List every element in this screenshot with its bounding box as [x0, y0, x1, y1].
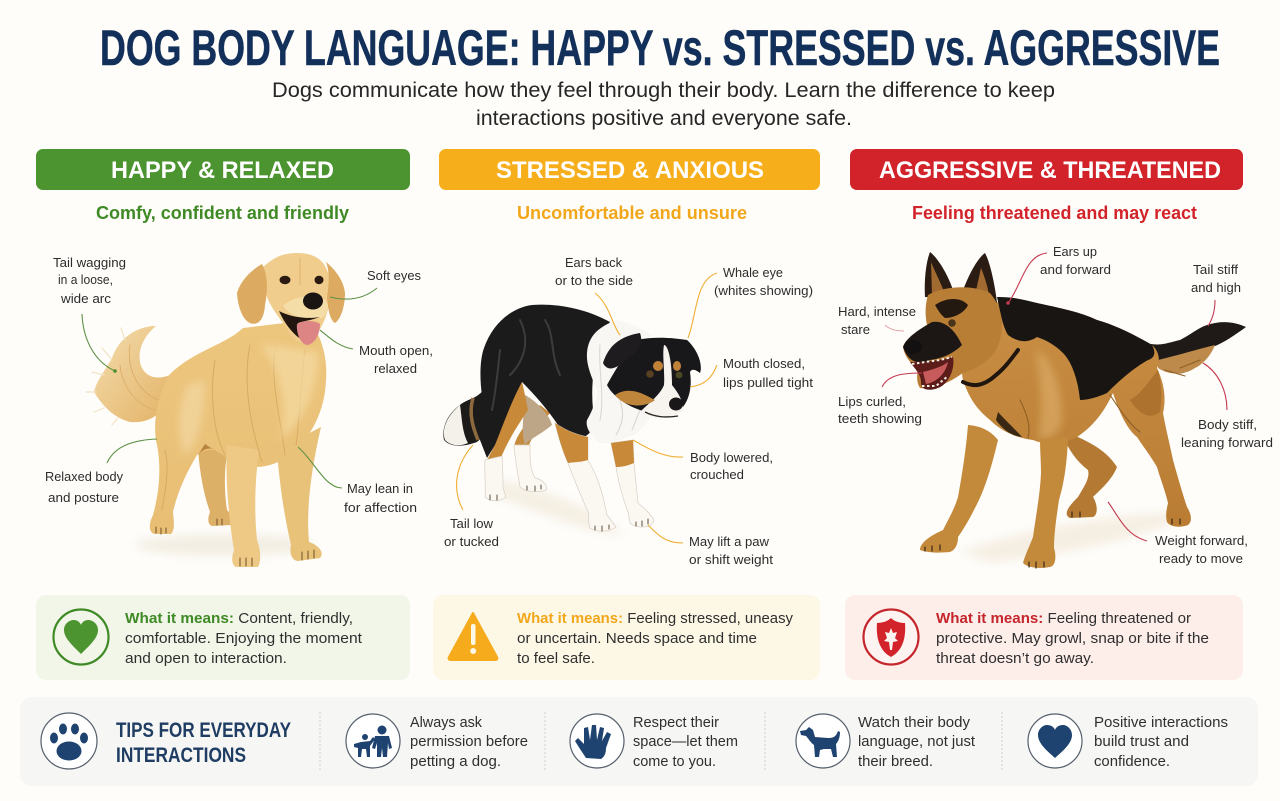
tips heading: INTERACTIONS — [116, 744, 246, 767]
tip text: permission before — [410, 734, 528, 750]
callout: relaxed body: Relaxed body — [45, 469, 123, 484]
callout: tail: wide arc — [60, 291, 111, 306]
callout: lips curled: teeth showing — [838, 411, 922, 426]
dog illustration: collie — [443, 305, 701, 535]
callout: may lift a paw — [648, 525, 773, 567]
callout: whale eye: Whale eye — [723, 265, 783, 280]
callout: may lift a paw: or shift weight — [689, 552, 773, 567]
callout: body stiff: leaning forward — [1181, 435, 1273, 450]
callout: ears back: Ears back — [565, 255, 622, 270]
callout: soft eyes — [330, 268, 421, 299]
callout: ears back — [555, 255, 633, 335]
heading bar: aggressive: AGGRESSIVE & THREATENED — [879, 157, 1221, 184]
meaning text: stressed: What it means: Feeling stressed, uneasy — [517, 610, 793, 627]
callout: body lowered — [633, 440, 773, 482]
callout: tail low: Tail low — [450, 516, 493, 531]
tip text: Respect their — [633, 715, 719, 731]
panel: stressed and anxious — [433, 149, 820, 680]
tip text: come to you. — [633, 754, 716, 770]
callout: may lean in: for affection — [344, 500, 417, 515]
heading bar: happy: HAPPY & RELAXED — [111, 157, 334, 184]
callout: may lean in: May lean in — [347, 481, 413, 496]
callout: tail — [53, 255, 126, 373]
tip text: Positive interactions — [1094, 715, 1228, 731]
meaning text: happy: comfortable. Enjoying the moment — [125, 630, 363, 647]
meaning text: happy: and open to interaction. — [125, 650, 287, 667]
callout: weight forward: Weight forward, — [1155, 533, 1248, 548]
tip text — [858, 715, 975, 770]
callout: tail low: or tucked — [444, 534, 499, 549]
callout: body stiff — [1181, 363, 1273, 450]
meaning panel: happy — [36, 595, 410, 680]
meaning panel: stressed — [433, 595, 820, 680]
meaning panel: aggressive — [845, 595, 1243, 680]
tip: positive interactions — [1028, 714, 1228, 770]
meaning text: aggressive: threat doesn’t go away. — [936, 650, 1094, 667]
callout: tail: in a loose, — [58, 272, 113, 287]
meaning text: happy — [125, 610, 363, 667]
tip text — [1094, 715, 1228, 770]
callout: body lowered: crouched — [690, 467, 744, 482]
callout: mouth open: relaxed — [374, 361, 417, 376]
meaning text: aggressive — [936, 610, 1209, 667]
tip text — [410, 715, 528, 770]
callout: hard stare: stare — [841, 322, 870, 337]
tip text: their breed. — [858, 754, 933, 770]
tips heading — [116, 719, 291, 767]
intro text: Dogs communicate how they feel through their body. Learn the difference to keep — [272, 78, 1055, 102]
callout: tail stiff: Tail stiff — [1193, 262, 1238, 277]
tip text: petting a dog. — [410, 754, 501, 770]
tip text: Watch their body — [858, 715, 971, 731]
meaning text: stressed: or uncertain. Needs space and time — [517, 630, 757, 647]
subheading: happy: Comfy, confident and friendly — [96, 203, 349, 223]
icon: dog silhouette — [796, 714, 850, 768]
callout: mouth closed: Mouth closed, — [723, 356, 805, 371]
meaning text: stressed: to feel safe. — [517, 650, 595, 667]
panel: tips for everyday interactions — [20, 697, 1258, 786]
icon: shield in circle — [864, 610, 918, 664]
callout: relaxed body: and posture — [48, 490, 119, 505]
callout: mouth closed: lips pulled tight — [723, 375, 813, 390]
callout: lips curled — [838, 373, 922, 426]
tips heading: TIPS FOR EVERYDAY — [116, 719, 291, 742]
meaning text: aggressive: What it means: Feeling threatened or — [936, 610, 1191, 627]
icon: heart — [1028, 714, 1082, 768]
heading bar: stressed: STRESSED & ANXIOUS — [496, 157, 764, 184]
panel: happy and relaxed — [36, 149, 433, 680]
dog illustration: german shepherd — [903, 252, 1246, 568]
tip: watch body language — [796, 714, 975, 770]
tip text: space—let them — [633, 734, 738, 750]
callout: may lift a paw: May lift a paw — [689, 534, 769, 549]
icon: heart in circle — [54, 610, 108, 664]
heading bar: stressed — [439, 149, 820, 190]
icon: hand — [570, 714, 624, 768]
icon: warning triangle — [449, 613, 497, 660]
tip: respect space — [570, 714, 738, 770]
meaning text: aggressive: protective. May growl, snap or bite if the — [936, 630, 1209, 647]
callout: tail low — [444, 445, 499, 549]
callout: tail stiff — [1191, 262, 1241, 326]
tip text — [633, 715, 738, 770]
panel: aggressive and threatened — [838, 149, 1273, 680]
icon: paw — [41, 713, 97, 769]
subheading: aggressive: Feeling threatened and may react — [912, 203, 1197, 223]
callout: hard stare: Hard, intense — [838, 304, 916, 319]
callout: ears back: or to the side — [555, 273, 633, 288]
callout: weight forward: ready to move — [1159, 551, 1243, 566]
callout: soft eyes: Soft eyes — [367, 268, 421, 283]
tip text: language, not just — [858, 734, 975, 750]
callout: body stiff: Body stiff, — [1198, 417, 1257, 432]
subheading: stressed: Uncomfortable and unsure — [517, 203, 747, 223]
meaning text: happy: What it means: Content, friendly, — [125, 610, 353, 627]
callout: relaxed body — [45, 439, 157, 505]
meaning text: stressed — [517, 610, 793, 667]
callout: hard stare — [838, 304, 916, 337]
callout: mouth closed — [690, 356, 813, 390]
callout: lips curled: Lips curled, — [838, 394, 906, 409]
callout: whale eye — [688, 265, 813, 338]
callout: tail stiff: and high — [1191, 280, 1241, 295]
callout: mouth open: Mouth open, — [359, 343, 433, 358]
heading bar: happy — [36, 149, 410, 190]
callout: ears up — [1006, 244, 1111, 305]
callout: ears up: and forward — [1040, 262, 1111, 277]
callout: may lean in — [298, 447, 417, 515]
tip text: confidence. — [1094, 754, 1170, 770]
intro text — [272, 78, 1055, 130]
callout: mouth open — [320, 330, 433, 376]
tip text: build trust and — [1094, 734, 1189, 750]
callout: whale eye: (whites showing) — [714, 283, 813, 298]
intro text: interactions positive and everyone safe. — [476, 106, 852, 130]
tip text: Always ask — [410, 715, 483, 731]
callout: body lowered: Body lowered, — [690, 450, 773, 465]
dog illustration: golden retriever — [86, 253, 345, 567]
callout: tail: Tail wagging — [53, 255, 126, 270]
callout: weight forward — [1108, 502, 1248, 566]
heading bar: aggressive — [850, 149, 1243, 190]
icon: person and dog — [346, 714, 400, 768]
tip: ask permission — [346, 714, 528, 770]
callout: ears up: Ears up — [1053, 244, 1097, 259]
